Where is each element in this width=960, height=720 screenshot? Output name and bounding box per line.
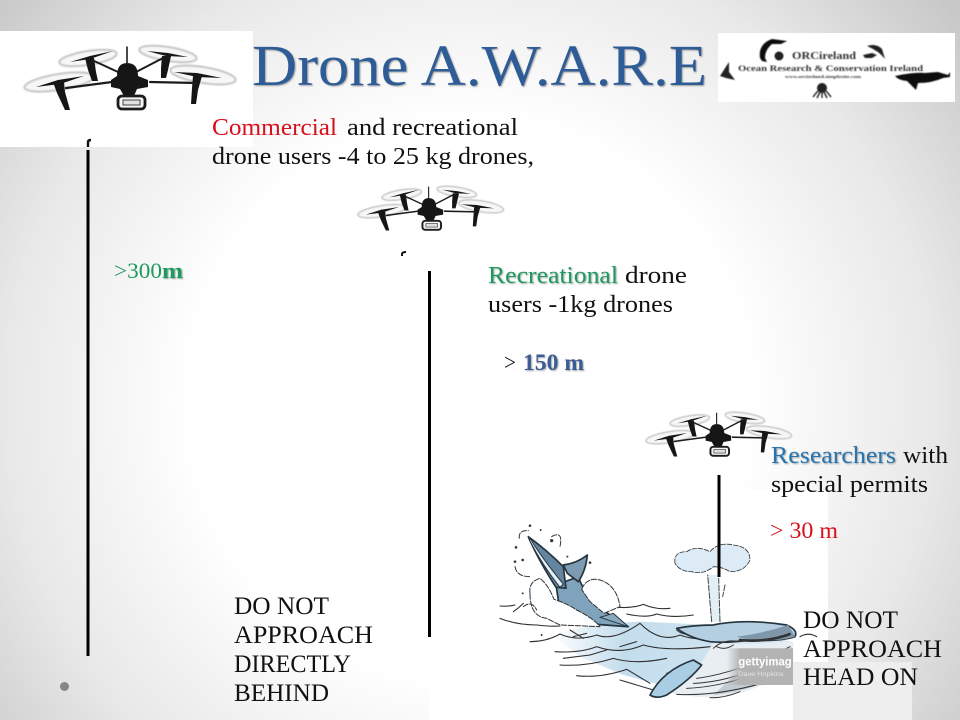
text block: commercial users bbox=[212, 115, 534, 170]
arrow line: 300 m distance bbox=[86, 150, 90, 656]
logo: wordmark: www.orcireland.simplesite.com bbox=[785, 74, 861, 79]
spout bbox=[675, 544, 750, 622]
text block: commercial users: drone users -4 to 25 kg drones, bbox=[212, 144, 534, 170]
arrow line: 30 m distance bbox=[718, 475, 720, 577]
distance label: 30 m: > 30 m bbox=[770, 518, 838, 543]
distance label: 150 m: 150 m bbox=[523, 350, 584, 375]
distance label: 300 m bbox=[114, 258, 183, 283]
logo: wordmark bbox=[738, 51, 923, 79]
text block: recreational users: users -1kg drones bbox=[488, 292, 673, 318]
getty watermark: Dave Hopkins bbox=[738, 671, 784, 678]
callout: do not approach head on: DO NOT bbox=[803, 607, 898, 634]
panel: whale image backing bbox=[429, 490, 912, 720]
title: Drone A.W.A.R.E bbox=[252, 33, 707, 98]
logo: wordmark: Ocean Research & Conservation Ireland bbox=[738, 63, 923, 73]
icon: medium drone bbox=[357, 176, 516, 256]
whale tail breaching bbox=[528, 537, 628, 627]
water wash bbox=[552, 622, 792, 690]
callout: do not approach head on: APPROACH bbox=[803, 636, 942, 663]
distance label: 300 m: >300 bbox=[114, 258, 162, 283]
bullet dot bbox=[60, 682, 69, 691]
humpback belly bbox=[653, 642, 793, 697]
waves bbox=[500, 603, 817, 690]
distance label: 300 m: m bbox=[162, 258, 183, 283]
panel: large drone image bbox=[0, 31, 253, 147]
callout: do not approach directly behind: BEHIND bbox=[234, 680, 329, 707]
logo: octopus silhouette bbox=[813, 83, 831, 98]
humpback body bbox=[677, 622, 796, 648]
icon: small drone bbox=[645, 410, 792, 456]
callout: do not approach directly behind: DIRECTLY bbox=[234, 651, 351, 678]
callout: do not approach directly behind: APPROACH bbox=[234, 622, 373, 649]
text block: researchers: special permits bbox=[771, 472, 928, 498]
whale illustration bbox=[500, 524, 817, 698]
splash clouds bbox=[515, 531, 620, 627]
text block: researchers bbox=[771, 443, 948, 498]
logo: seal, fish and dolphin silhouettes bbox=[720, 45, 885, 80]
text block: researchers: Researchers bbox=[771, 443, 896, 469]
text block: recreational users: Recreational bbox=[488, 263, 618, 289]
callout: do not approach head on bbox=[803, 607, 942, 691]
text block: recreational users: drone bbox=[625, 263, 687, 289]
callout: do not approach directly behind bbox=[234, 593, 373, 707]
text block: researchers: with bbox=[903, 443, 948, 469]
text block: commercial users: Commercial bbox=[212, 115, 337, 141]
arrow line: 150 m distance bbox=[428, 271, 431, 637]
humpback flipper bbox=[650, 660, 702, 697]
callout: do not approach head on: HEAD ON bbox=[803, 664, 918, 691]
text block: commercial users: and recreational bbox=[347, 115, 518, 141]
getty watermark: gettyimag bbox=[738, 655, 792, 669]
splash droplets bbox=[514, 524, 591, 636]
text block: recreational users bbox=[488, 263, 687, 318]
throat grooves bbox=[677, 647, 792, 698]
panel: ORCireland logo bbox=[718, 33, 955, 102]
logo: whale silhouette bbox=[895, 72, 950, 90]
getty watermark bbox=[727, 648, 793, 685]
logo: wordmark: ORCireland bbox=[792, 51, 856, 62]
callout: do not approach directly behind: DO NOT bbox=[234, 593, 329, 620]
distance label: 150 m: > bbox=[504, 350, 516, 375]
logo: orca silhouette bbox=[760, 39, 787, 62]
